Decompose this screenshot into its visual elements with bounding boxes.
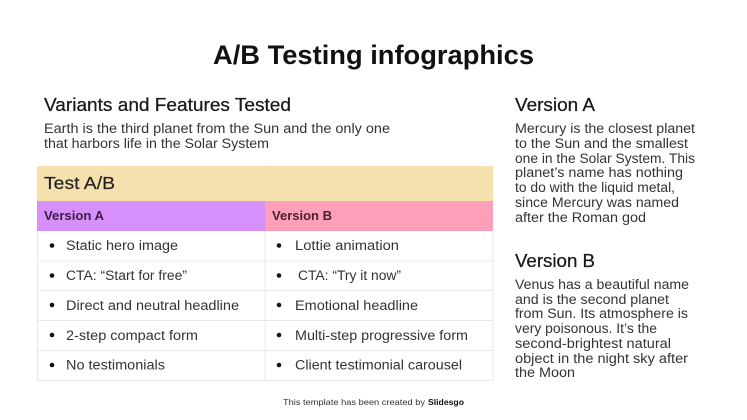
footer credit: This template has been created by — [283, 397, 426, 407]
list: Version A features: 2-step compact form — [66, 328, 198, 343]
text block: intro description: Earth is the third planet from the Sun and the only one — [44, 121, 390, 136]
text block: Version B body: object in the night sky after — [515, 351, 689, 366]
heading: Version B: Version B — [515, 251, 595, 271]
text block: Version A body: to do with the liquid metal, — [515, 180, 675, 195]
text block: Version A body: after the Roman god — [515, 210, 646, 225]
text block: Version B body: Venus has a beautiful name — [515, 277, 689, 292]
column header: Version A: Version A — [44, 208, 105, 223]
footer credit: Slidesgo — [428, 397, 464, 407]
list: Version B features: Multi-step progressive form — [295, 328, 468, 343]
column header: Version A — [37, 201, 265, 231]
panel: Version A description — [515, 95, 695, 225]
text block: Version B body: and is the second planet — [515, 292, 669, 307]
panel: test comparison table — [37, 166, 493, 381]
text block: Version B body: second-brightest natural — [515, 336, 671, 351]
table header: Test A/B: Test A/B — [44, 173, 115, 193]
heading: Version A: Version A — [515, 95, 595, 115]
text block: Version A body: one in the Solar System. This — [515, 151, 695, 166]
list: Version A features: Direct and neutral headline — [66, 298, 239, 313]
list: Version A features: CTA: “Start for free” — [66, 268, 187, 283]
list: Version B features: CTA: “Try it now” — [298, 268, 401, 283]
table header: Test A/B — [37, 166, 493, 201]
text block: Version A body: Mercury is the closest planet — [515, 121, 695, 136]
text block: intro description: that harbors life in the Solar System — [44, 136, 269, 151]
column header: Version B — [265, 201, 493, 231]
text block: Version A body — [515, 121, 695, 225]
text block: Version A body: to the Sun and the smallest — [515, 136, 688, 151]
list: Version A features: No testimonials — [66, 358, 165, 372]
text block: intro description — [44, 121, 390, 151]
text block: Version B body — [515, 277, 689, 380]
title: A/B Testing infographics — [213, 40, 534, 70]
list: Version B features: Emotional headline — [295, 298, 418, 313]
list: Version A features: Static hero image — [66, 238, 178, 253]
panel: variants and features tested intro — [44, 95, 390, 151]
list: Version B features: Lottie animation — [295, 238, 399, 253]
column header: Version B: Version B — [272, 208, 332, 223]
text block: Version A body: since Mercury was named — [515, 195, 679, 210]
text block: Version A body: planet’s name has nothing — [515, 165, 683, 180]
text block: Version B body: very poisonous. It’s the — [515, 321, 657, 336]
heading: variants and features tested: Variants and Features Tested — [44, 95, 291, 115]
list: Version A features — [50, 238, 239, 372]
text block: Version B body: from Sun. Its atmosphere is — [515, 306, 688, 321]
panel: Version B description — [515, 251, 689, 380]
list: Version B features: Client testimonial carousel — [295, 358, 462, 372]
text block: Version B body: the Moon — [515, 365, 575, 380]
list: Version B features — [277, 238, 468, 372]
